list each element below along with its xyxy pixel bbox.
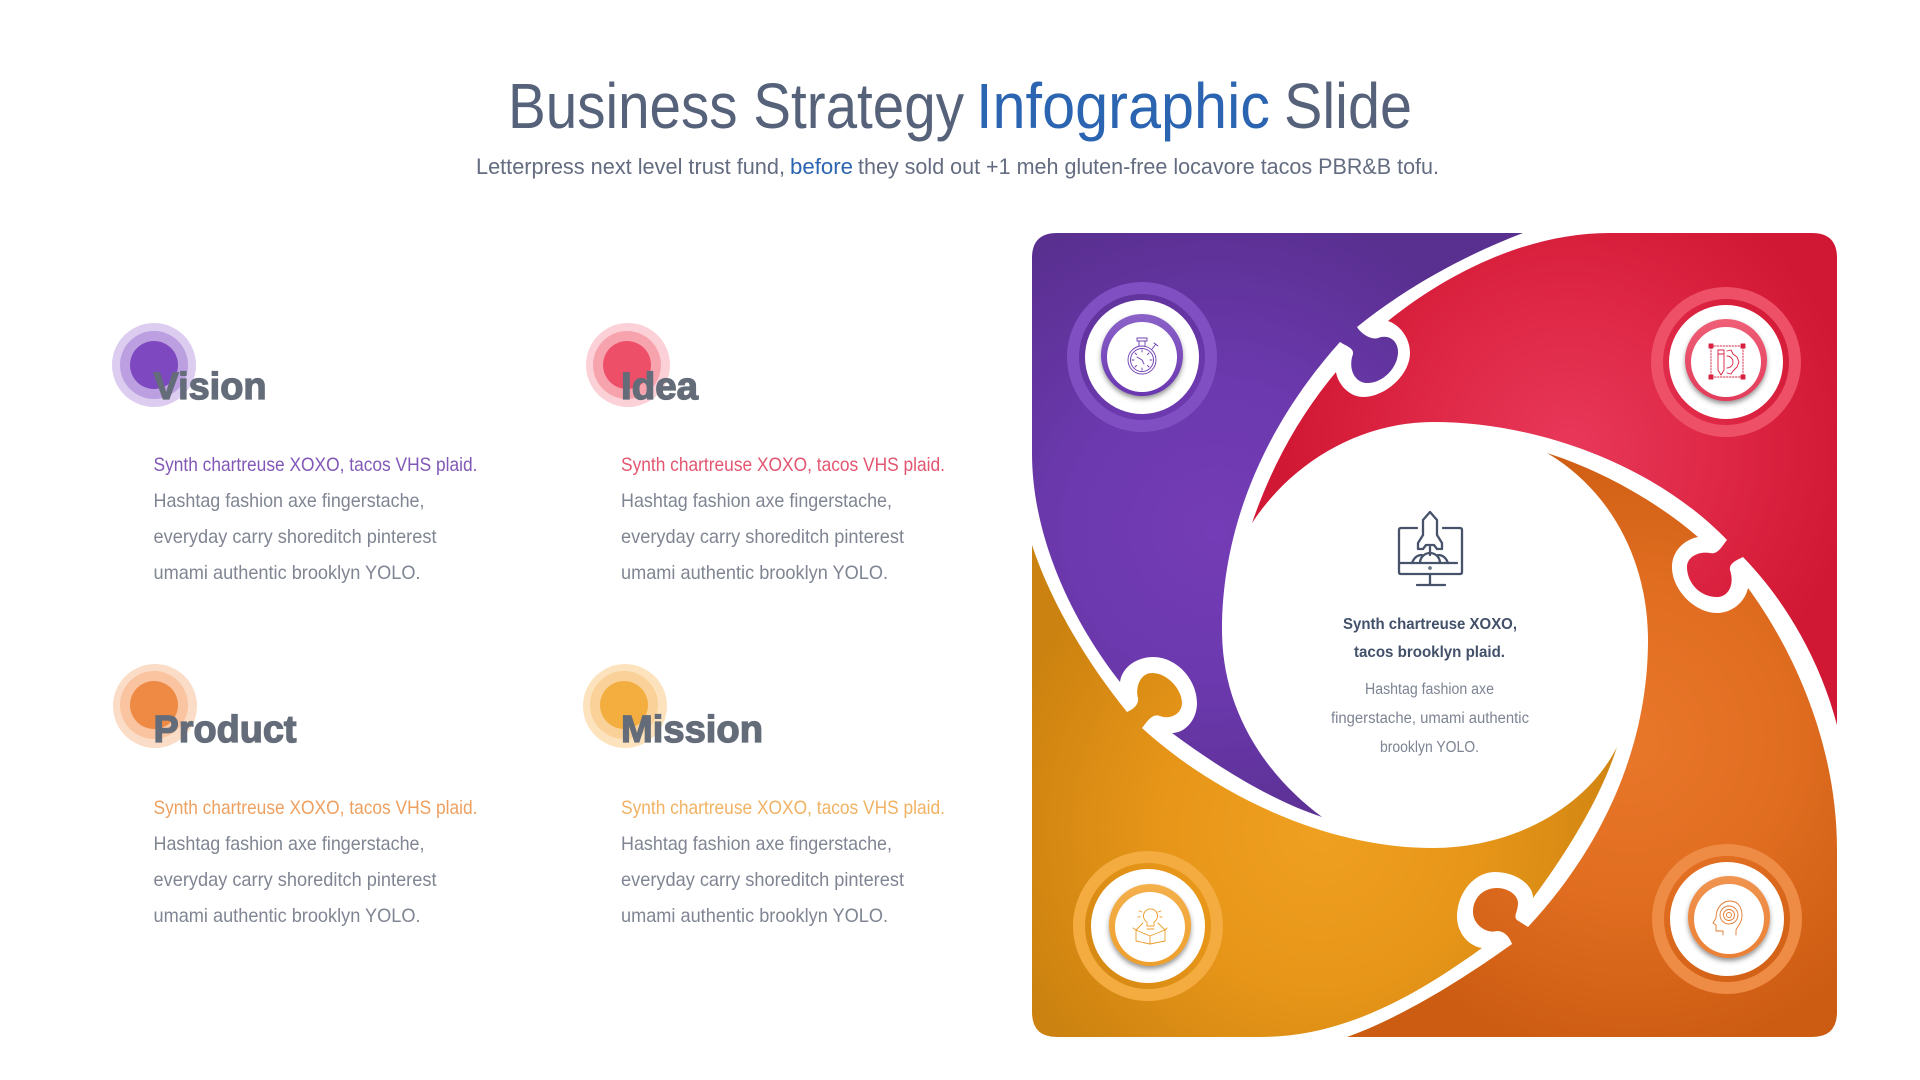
text: idea body: Hashtag fashion axe fingerstache,: [621, 490, 892, 512]
text: product body: Hashtag fashion axe fingerstache,: [154, 833, 424, 855]
icon: mission bullet: [583, 664, 667, 748]
panel: idea: [586, 323, 945, 584]
puzzle piece: red: [1252, 233, 1837, 725]
icon: product bullet: [113, 664, 197, 748]
icon: rocket and monitor: [1399, 512, 1462, 585]
text: mission body: umami authentic brooklyn YOLO.: [621, 905, 888, 927]
panel: product: [113, 664, 478, 927]
heading: vision: Vision: [154, 366, 266, 408]
text: center heading: Synth chartreuse XOXO,: [1343, 616, 1517, 633]
text: product body: [154, 797, 478, 927]
heading: product: Product: [154, 709, 297, 751]
panel: mission: [583, 664, 945, 927]
icon: design gear and pencil: [1709, 344, 1745, 379]
text: vision body: Hashtag fashion axe fingerstache,: [154, 490, 424, 512]
icon: head with maze: [1713, 901, 1742, 935]
text: center body: fingerstache, umami authentic: [1331, 710, 1529, 727]
text: idea body: [621, 454, 945, 584]
heading: idea: Idea: [621, 366, 699, 408]
text: center body: brooklyn YOLO.: [1380, 739, 1479, 756]
icon: idea bullet: [586, 323, 670, 407]
text: mission body: everyday carry shoreditch pinterest: [621, 869, 905, 891]
puzzle piece: yellow: [1032, 545, 1617, 1037]
subtitle: before: [790, 154, 853, 179]
badge: head maze: [1658, 850, 1796, 988]
subtitle: [476, 154, 1439, 179]
text: mission body: [621, 797, 945, 927]
icon: vision bullet: [112, 323, 196, 407]
heading: mission: Mission: [621, 709, 763, 751]
title: Slide: [1284, 70, 1412, 142]
text: vision body: [154, 454, 478, 584]
text: product body: umami authentic brooklyn YOLO.: [154, 905, 420, 927]
text: center body: [1331, 681, 1529, 756]
text: vision body: Synth chartreuse XOXO, tacos VHS plaid.: [154, 454, 478, 476]
center content: [1331, 512, 1529, 756]
badge: design: [1657, 293, 1795, 431]
puzzle piece: orange: [1347, 453, 1837, 1037]
icon: stopwatch: [1128, 338, 1158, 374]
subtitle: they sold out +1 meh gluten-free locavore tacos PBR&B tofu.: [858, 154, 1439, 179]
badge: idea box: [1079, 857, 1217, 995]
text: mission body: Synth chartreuse XOXO, tacos VHS plaid.: [621, 797, 945, 819]
text: center heading: tacos brooklyn plaid.: [1354, 644, 1505, 661]
panel: vision: [112, 323, 478, 584]
title: [508, 70, 1412, 142]
text: idea body: Synth chartreuse XOXO, tacos VHS plaid.: [621, 454, 945, 476]
text: vision body: umami authentic brooklyn YOLO.: [154, 562, 420, 584]
text: product body: Synth chartreuse XOXO, tacos VHS plaid.: [154, 797, 478, 819]
text: center body: Hashtag fashion axe: [1365, 681, 1494, 698]
text: idea body: umami authentic brooklyn YOLO.: [621, 562, 888, 584]
text: idea body: everyday carry shoreditch pinterest: [621, 526, 905, 548]
subtitle: Letterpress next level trust fund,: [476, 154, 785, 179]
text: center heading: [1343, 616, 1517, 661]
title: Infographic: [976, 70, 1270, 142]
text: vision body: everyday carry shoreditch pinterest: [154, 526, 437, 548]
text: mission body: Hashtag fashion axe fingerstache,: [621, 833, 892, 855]
text: product body: everyday carry shoreditch pinterest: [154, 869, 437, 891]
title: Business Strategy: [508, 70, 964, 142]
puzzle diagram: [1032, 233, 1837, 1037]
puzzle piece: purple: [1032, 233, 1523, 817]
icon: lightbulb in box: [1133, 909, 1167, 944]
badge: stopwatch: [1073, 288, 1211, 426]
